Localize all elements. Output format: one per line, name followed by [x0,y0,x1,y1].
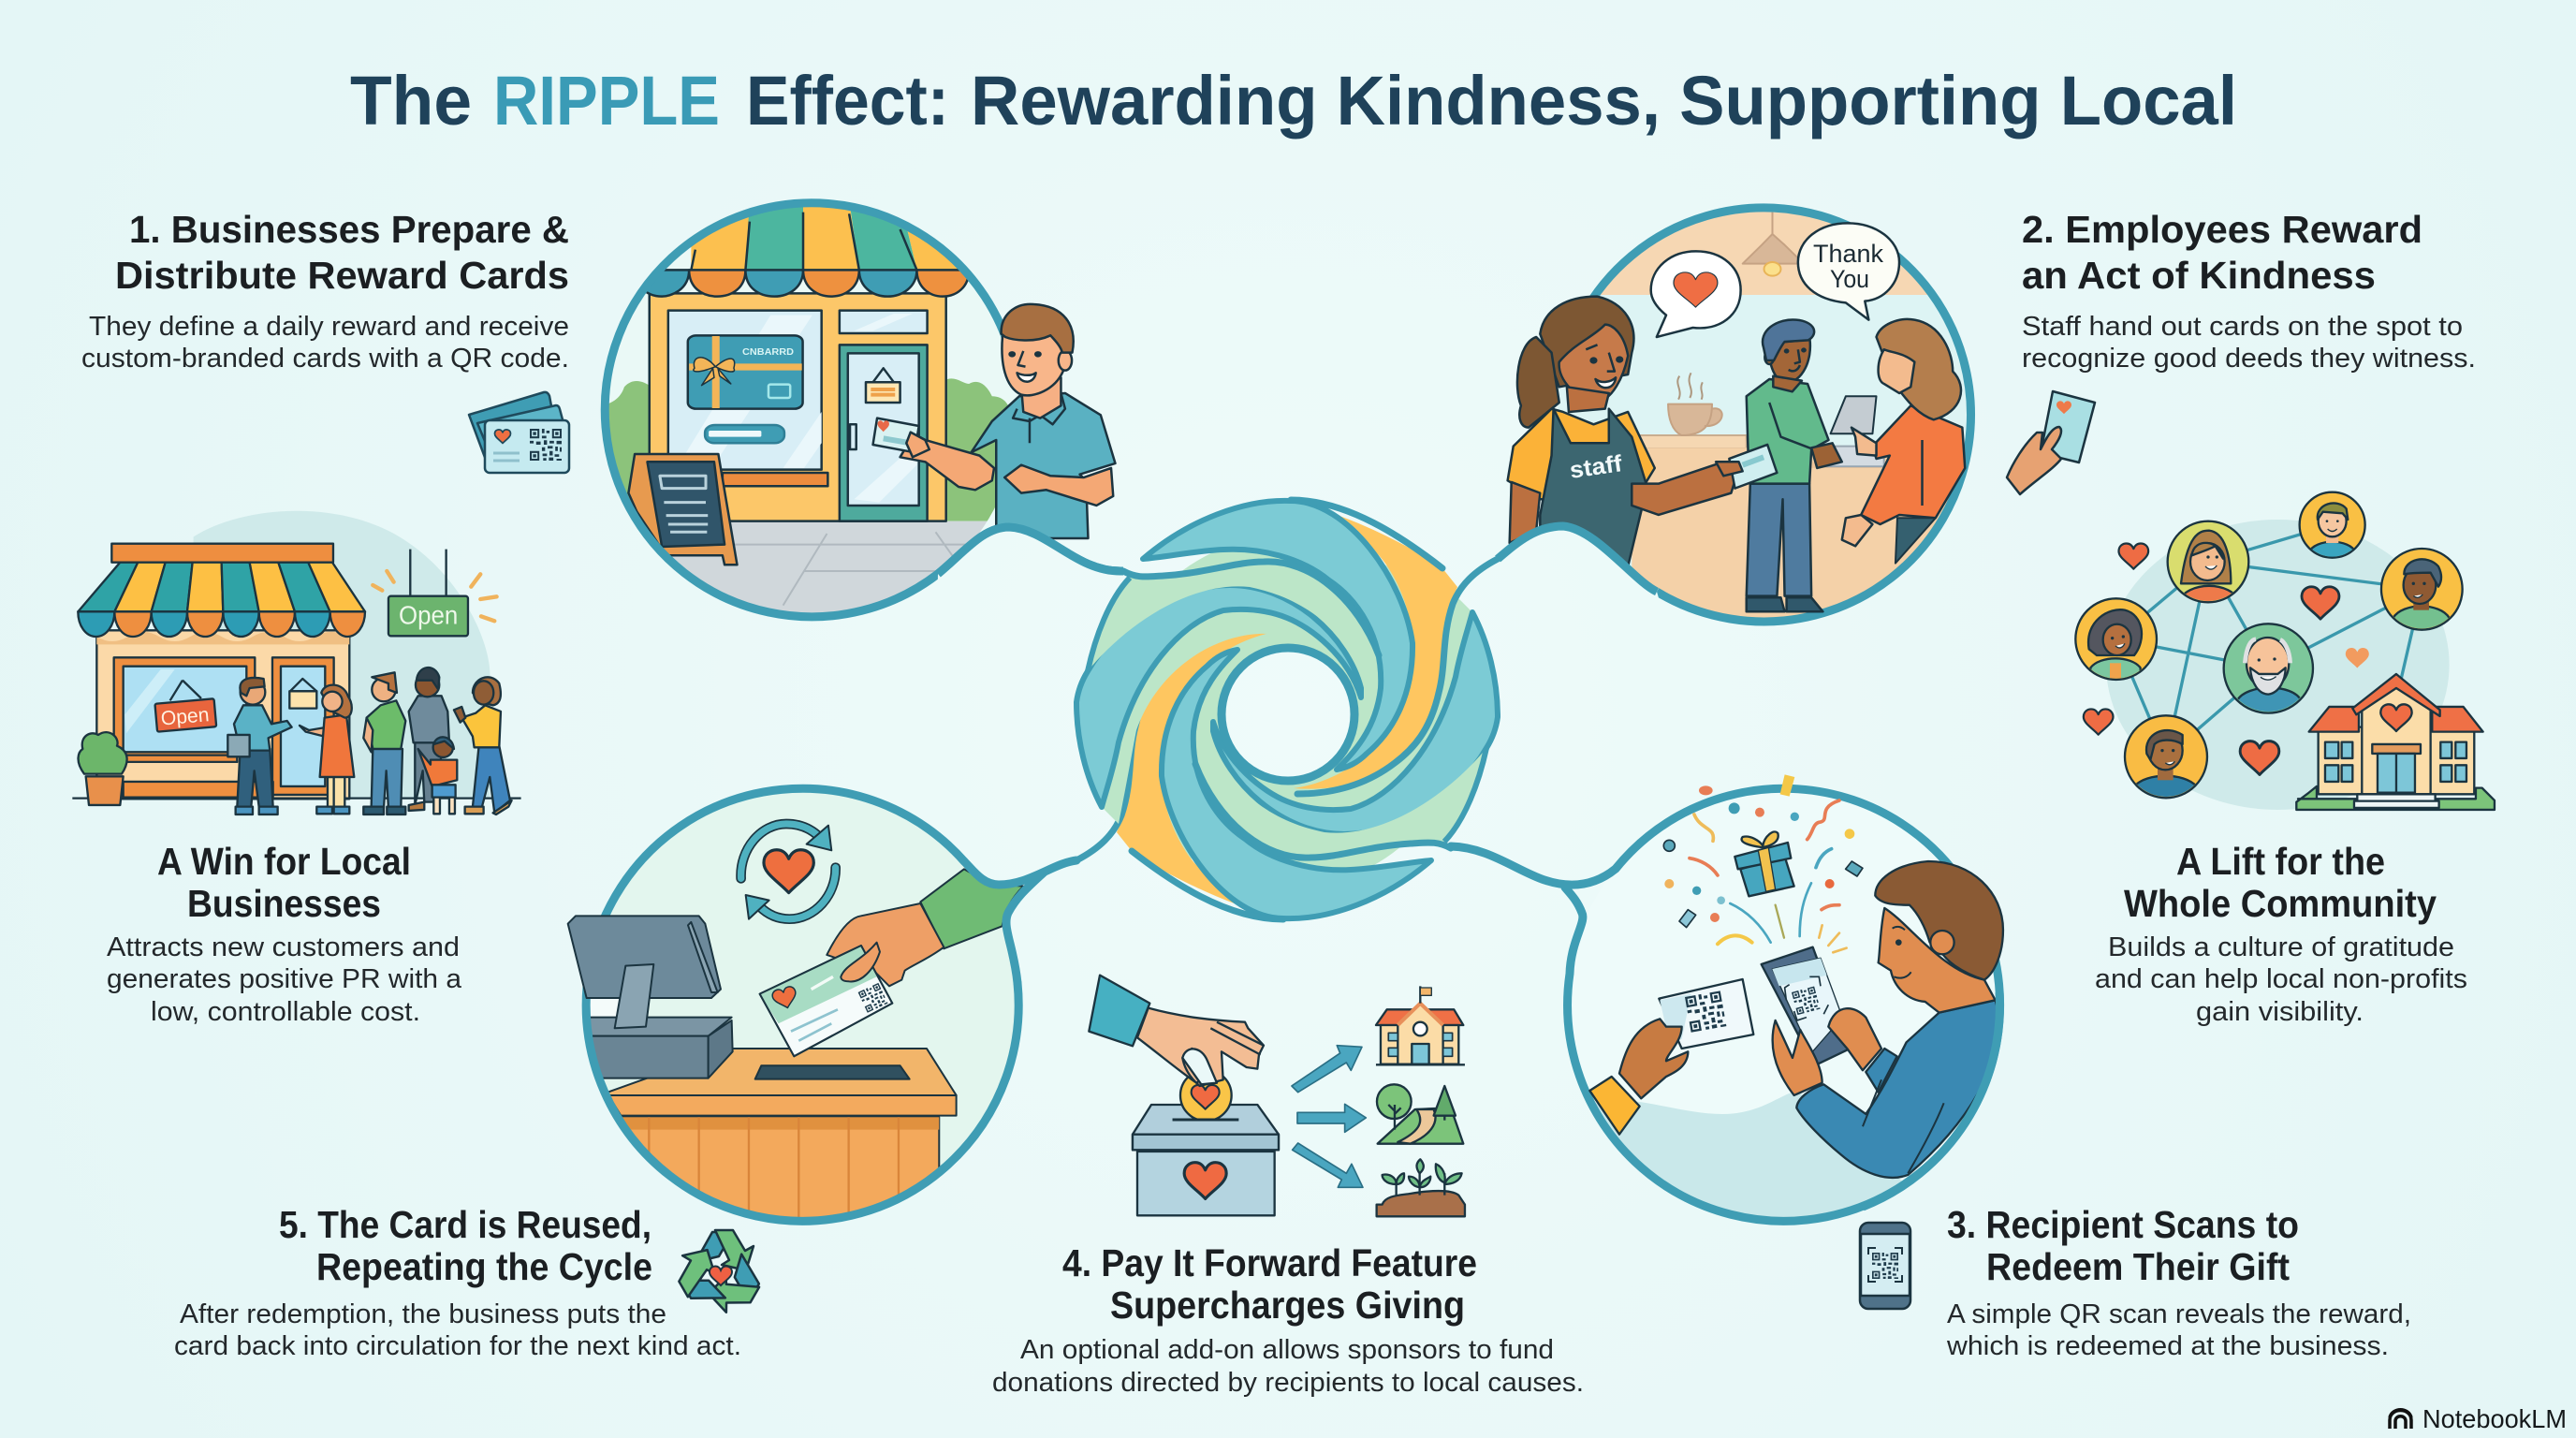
text block: step 2: an Act of Kindness [2022,254,2376,297]
title: Rewarding Kindness, Supporting Local [971,62,2237,139]
text block: step 1 [81,208,569,374]
gift, confetti, card, phone and recipient [1589,774,2003,1178]
cafe background [1558,212,1967,618]
circle fill [1567,789,1999,1222]
text block: step 5: 5. The Card is Reused, [279,1203,651,1246]
text block: step 3: A simple QR scan reveals the reward, [1947,1299,2411,1329]
text block: step 5 [174,1203,741,1361]
text block: step 5: Repeating the Cycle [316,1245,652,1288]
title: The [350,62,472,139]
register, recycle loop, hand and card [568,824,1023,1056]
park icon [1377,1084,1463,1144]
title [350,62,2237,139]
text block: step 1: They define a daily reward and receive [89,312,569,342]
text block: win for local businesses [107,840,462,1027]
illustration: step 5 card reuse circle [568,788,1076,1229]
circle fill [586,788,1018,1221]
hearts [2084,543,2369,774]
swirl arm lower [1076,595,1498,919]
icon: stack of reward cards [469,392,569,473]
text block: step 4: An optional add-on allows sponsors to fund [1020,1335,1554,1365]
avatar: boy [2300,492,2365,562]
counter [580,998,957,1229]
illustration: step 2 staff handing card circle [1495,203,1975,625]
customers in line [227,668,512,814]
hand dropping coin [1089,976,1264,1086]
avatar: woman with curly hair [2075,598,2157,683]
pale backdrop [194,511,490,799]
swirl centre hole [1222,648,1354,781]
text block: win for local businesses: A Win for Local [157,840,411,883]
text block: step 5: card back into circulation for the next kind act. [174,1331,741,1361]
text block: step 1: custom-branded cards with a QR code. [81,344,569,374]
text block: step 3: Redeem Their Gift [1986,1245,2290,1288]
wave mask under owner [936,527,1217,655]
text block: step 2: 2. Employees Reward [2022,208,2422,251]
text block: win for local businesses: Businesses [187,882,381,925]
text block: step 5: After redemption, the business puts the [180,1299,666,1329]
text block: step 2: Staff hand out cards on the spot to [2022,312,2463,342]
bubble text: thank you: Thank [1813,240,1883,268]
text block: step 3: 3. Recipient Scans to [1947,1203,2299,1246]
community building [2296,674,2495,810]
avatar: woman [2168,521,2248,606]
connector wave [1498,526,1657,592]
network links [2116,525,2422,756]
donation box [1133,1070,1279,1215]
connector tail [964,860,1076,983]
avatar: man [2381,549,2463,634]
wave mask under staff [1442,526,1676,655]
text block: step 3: which is redeemed at the business. [1946,1331,2389,1361]
text block: step 4: Supercharges Giving [1110,1284,1465,1327]
title: RIPPLE [493,62,720,139]
school icon [1376,986,1465,1064]
text block: step 4: donations directed by recipients to local causes. [992,1368,1584,1398]
swirl underlay [1112,536,1464,888]
hill backdrop [1596,1093,1902,1217]
illustration: win for local businesses [72,511,521,814]
potted plant [79,732,127,805]
shop owner holding card [873,304,1115,538]
text block: lift for the community: A Lift for the [2176,840,2385,883]
text block: step 2 [2022,208,2476,374]
text block: step 4 [992,1241,1584,1398]
avatar: young man [2125,715,2207,799]
text block: win for local businesses: low, controllable cost. [151,997,420,1027]
arrows [1292,1046,1366,1187]
circle background and storefront [608,207,1008,612]
staff, customer and friend figures [1508,223,1965,611]
hanging open sign: Open [399,601,458,630]
text block: step 1: 1. Businesses Prepare & [129,208,569,251]
text block: step 2: recognize good deeds they witness. [2022,344,2476,374]
text block: lift for the community: and can help local non-profits [2095,964,2467,994]
storefront: Open [160,703,210,730]
ground line [72,795,521,801]
pale backdrop [2106,520,2450,810]
icon: hand holding card [2007,391,2095,494]
circle outline [605,203,1123,617]
text block: lift for the community [2095,840,2467,1027]
text block: lift for the community: Builds a culture of gratitude [2108,932,2454,962]
title: Effect: [746,62,949,139]
illustration: step 3 scanning circle [1451,774,2003,1236]
text block: step 4: 4. Pay It Forward Feature [1062,1241,1477,1284]
storefront [78,544,365,799]
avatar: elder man with beard [2224,624,2313,714]
circle outline lower right, over sleeve [1863,992,1999,1207]
icon: recycle with heart [668,1230,768,1320]
illustration: step 1 storefront circle [601,198,1123,622]
apron label: staff [1568,450,1624,484]
illustration: community network [2075,492,2495,810]
illustration: step 4 pay it forward [1089,976,1465,1216]
brand mark: NotebookLM: NotebookLM [2422,1404,2567,1433]
text block: win for local businesses: Attracts new customers and [107,932,460,962]
garden bed icon [1377,1159,1465,1216]
text block: step 3 [1946,1203,2411,1361]
hanging open sign [373,550,497,636]
circle outline [586,788,1018,1221]
bubble text: you: You [1830,265,1869,293]
circle outline [1582,208,1970,622]
swirl arm upper [1076,500,1498,824]
text block: lift for the community: gain visibility. [2196,997,2364,1027]
central swirl [1076,500,1498,919]
text block: win for local businesses: generates positive PR with a [107,964,462,994]
circle outline with tail [1451,788,2000,1221]
text block: lift for the community: Whole Community [2124,882,2437,925]
icon: phone scanning QR [1860,1223,1910,1309]
connector wave [938,527,1123,574]
text block: step 1: Distribute Reward Cards [115,254,569,297]
card label: CNBARRD [742,347,794,358]
